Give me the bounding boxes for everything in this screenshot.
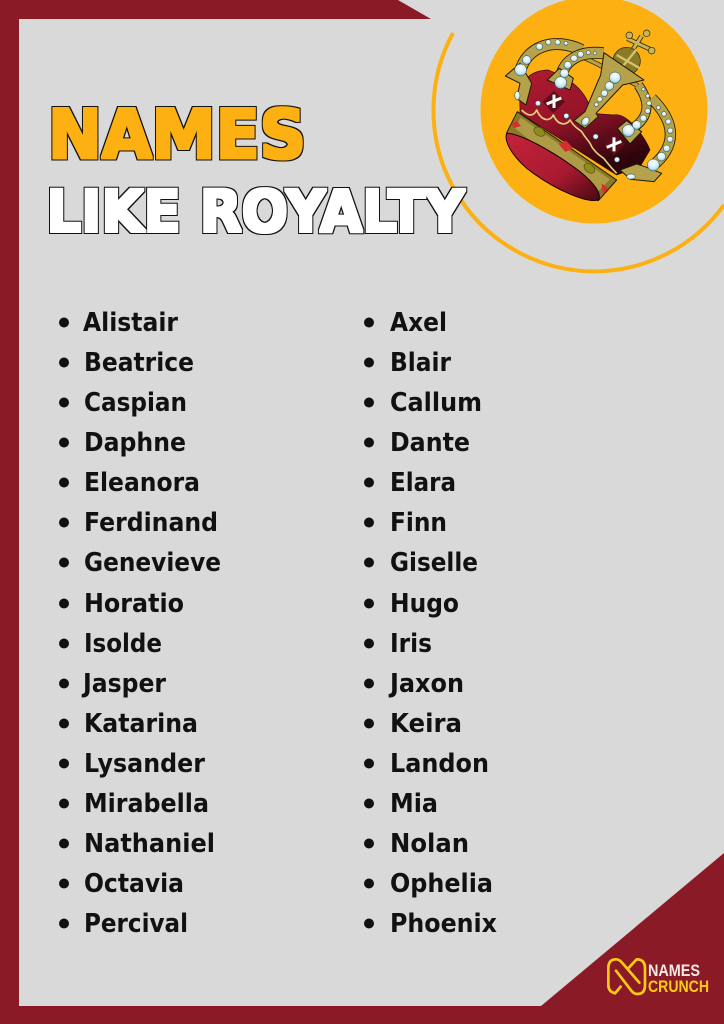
list: left column: Ferdinand [84,508,218,538]
list: right column: Elara [390,468,456,498]
rear gold arches [520,44,670,167]
list: right column: Hugo [390,589,459,619]
list: right column: Jaxon [388,669,464,699]
pearls [515,40,673,179]
heading: like royalty: LIKE ROYALTY [46,178,465,246]
list: right column: Finn [390,508,447,538]
list: right column: Axel [390,308,447,338]
list: left column: Horatio [84,589,184,619]
crown opening [506,133,599,201]
list: right column: Giselle [390,548,478,578]
title [46,96,465,246]
list: left column: Caspian [84,388,187,418]
jewel crosses [543,91,625,155]
list: left column: Percival [84,909,188,939]
logo: names crunch [608,959,709,996]
list: right column: Mia [390,789,438,819]
list: left column: Eleanora [84,468,200,498]
crown [505,30,673,201]
list: right column: Keira [390,709,462,739]
heading: names: NAMES [48,96,306,175]
decorative ring [433,33,724,272]
list: right column: Iris [390,629,432,659]
logo text: names: NAMES [648,962,700,980]
yellow circle [480,0,708,224]
list: left column: Beatrice [84,348,194,378]
list: left column: Isolde [84,629,162,659]
list: left column: Jasper [81,669,166,699]
list: left column: Octavia [84,869,184,899]
scalloped velvet edge [522,110,617,173]
list: right column: Phoenix [390,909,497,939]
list: right column: Nolan [390,829,469,859]
list: left column [59,308,221,939]
velvet [520,70,650,175]
list: right column: Callum [390,388,482,418]
icon: crown in circle [480,0,708,224]
arch feet and centre arch [505,53,662,182]
list: left column: Katarina [84,709,198,739]
logo text: crunch: CRUNCH [648,977,709,996]
list: right column: Blair [390,348,451,378]
list: left column: Lysander [84,749,205,779]
list: left column: Genevieve [84,548,221,578]
list: right column [364,308,497,939]
list: right column: Ophelia [390,869,493,899]
list: left column: Alistair [83,308,178,338]
list: left column: Daphne [84,428,186,458]
icon: n mark [608,959,645,994]
list: left column: Mirabella [84,789,209,819]
list: left column: Nathaniel [84,829,215,859]
list: right column: Dante [390,428,470,458]
orb and cross [613,30,655,75]
list: right column: Landon [390,749,489,779]
gold band [507,112,617,201]
